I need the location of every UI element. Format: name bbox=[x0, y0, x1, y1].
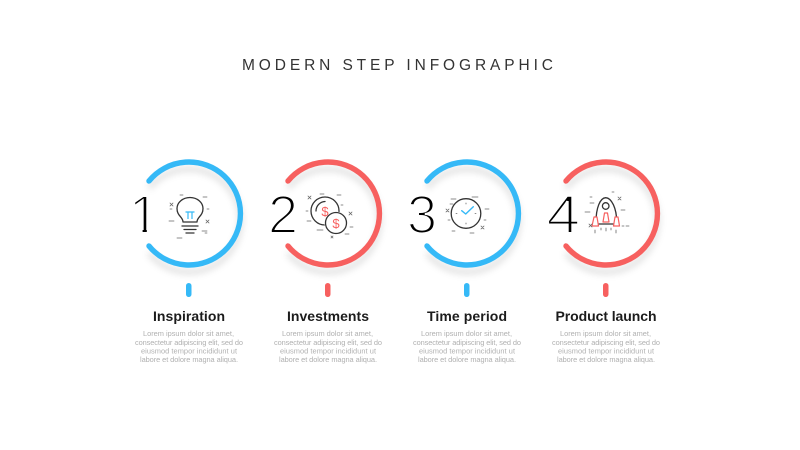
description 2: consectetur adipiscing elit, sed do bbox=[274, 338, 382, 347]
step 4: product launch bbox=[546, 162, 660, 364]
icon: rocket bbox=[585, 192, 629, 233]
ring 3 bbox=[427, 162, 518, 272]
description 3: Lorem ipsum dolor sit amet, bbox=[421, 329, 512, 338]
icon: light bulb bbox=[169, 195, 209, 238]
description 1: consectetur adipiscing elit, sed do bbox=[135, 338, 243, 347]
ring 4 bbox=[566, 162, 657, 272]
description 1 bbox=[135, 329, 243, 364]
icon: coins: $ bbox=[321, 204, 329, 219]
title: MODERN STEP INFOGRAPHIC bbox=[242, 57, 553, 74]
description 4: consectetur adipiscing elit, sed do bbox=[552, 338, 660, 347]
heading: time period: Time period bbox=[427, 308, 507, 324]
description 3: consectetur adipiscing elit, sed do bbox=[413, 338, 521, 347]
step 3: time period bbox=[407, 162, 521, 364]
ring 2 bbox=[288, 162, 379, 272]
description 3 bbox=[413, 329, 521, 364]
connector dot 4 bbox=[603, 283, 608, 297]
heading: product launch: Product launch bbox=[556, 308, 656, 324]
number 1: 1 bbox=[129, 185, 159, 245]
description 2 bbox=[274, 329, 382, 364]
icon: coins: $ bbox=[332, 216, 340, 231]
connector dot 3 bbox=[464, 283, 470, 297]
description 4: Lorem ipsum dolor sit amet, bbox=[560, 329, 651, 338]
heading: investments: Investments bbox=[287, 308, 369, 324]
description 3: eiusmod tempor incididunt ut bbox=[419, 346, 515, 356]
description 1: Lorem ipsum dolor sit amet, bbox=[143, 329, 234, 338]
number 2: 2 bbox=[268, 185, 298, 245]
step 2: investments bbox=[268, 162, 382, 364]
ring 1 bbox=[149, 162, 240, 272]
heading: inspiration: Inspiration bbox=[153, 308, 225, 324]
description 4: eiusmod tempor incididunt ut bbox=[558, 346, 654, 356]
description 3: labore et dolore magna aliqua. bbox=[418, 355, 516, 364]
description 1: labore et dolore magna aliqua. bbox=[140, 355, 238, 364]
connector dot 1 bbox=[186, 283, 192, 297]
description 2: eiusmod tempor incididunt ut bbox=[280, 346, 376, 356]
connector dot 2 bbox=[325, 283, 330, 297]
description 2: labore et dolore magna aliqua. bbox=[279, 355, 377, 364]
icon: coins bbox=[306, 194, 353, 238]
description 4: labore et dolore magna aliqua. bbox=[557, 355, 655, 364]
icon: clock bbox=[446, 197, 489, 233]
step 1: inspiration bbox=[129, 162, 243, 364]
description 1: eiusmod tempor incididunt ut bbox=[141, 346, 237, 356]
description 4 bbox=[552, 329, 660, 364]
number 3: 3 bbox=[407, 185, 437, 245]
description 2: Lorem ipsum dolor sit amet, bbox=[282, 329, 373, 338]
number 4: 4 bbox=[546, 185, 580, 245]
